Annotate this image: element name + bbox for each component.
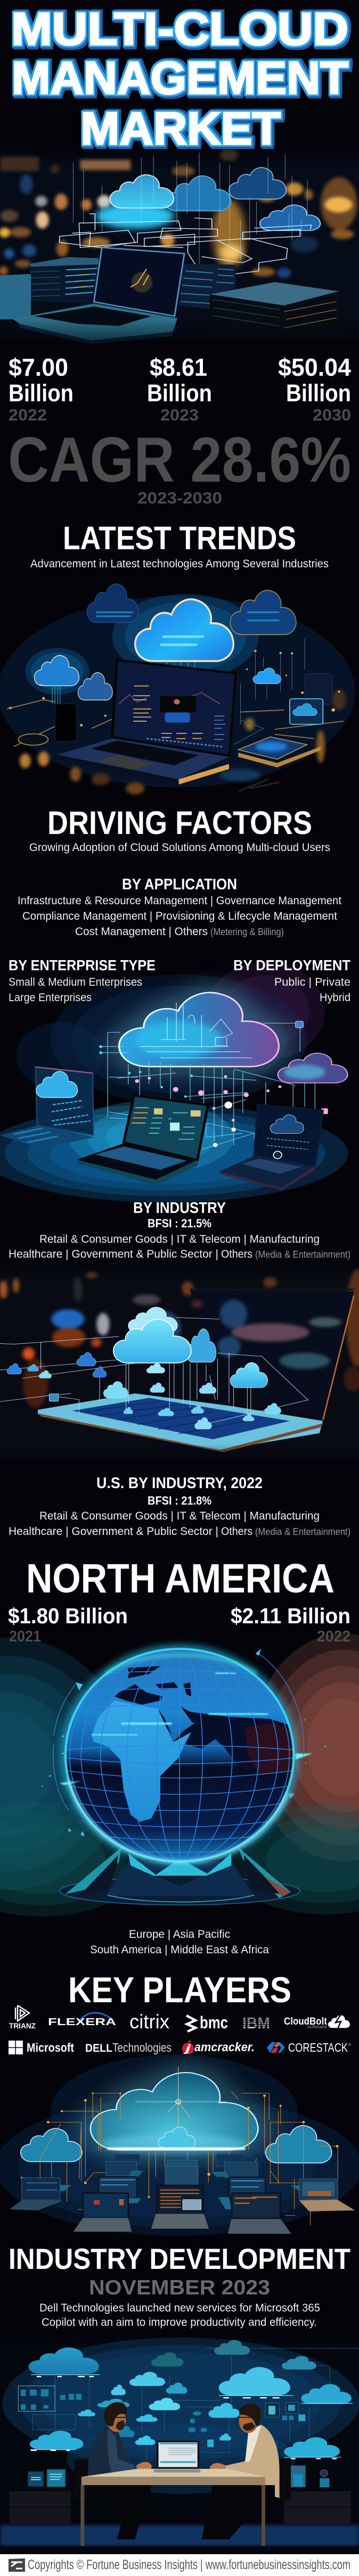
segment: by application (18, 876, 341, 938)
segment: by enterprise type: BY ENTERPRISE TYPE (9, 957, 156, 973)
North America 2021 value: $1.80 Billion (8, 1604, 128, 1628)
stat: 2022 market size: 2022 (9, 406, 47, 424)
segment: by enterprise type (9, 957, 156, 1004)
segment: by deployment (233, 957, 350, 1004)
front row laptops (74, 2185, 291, 2234)
laptop array (9, 2154, 355, 2234)
floor (0, 2525, 359, 2554)
segment: by industry: BY INDUSTRY (133, 1200, 226, 1217)
stat: 2023 market size: Billion (147, 379, 212, 407)
data chip (49, 1394, 59, 1401)
segment: by industry: Others (221, 1248, 252, 1260)
stat: 2030 market size: Billion (286, 379, 351, 407)
back row laptops (106, 2154, 258, 2185)
stat: 2022 market size (9, 353, 74, 424)
segment: by deployment: Public | Private (274, 976, 350, 988)
North America 2022 value (231, 1604, 350, 1645)
logo: Trianz: TRIANZ (9, 2021, 36, 2030)
orange network lines (40, 2091, 338, 2226)
North America 2022 value: 2022 (317, 1628, 350, 1645)
title: MANAGEMENT (12, 53, 348, 104)
logo: IBM: IBM (242, 2015, 270, 2032)
heading: key players: KEY PLAYERS (68, 1970, 291, 2010)
development description: Dell Technologies launched new services for Microsoft 365 (39, 2302, 320, 2314)
glow beneath clouds (83, 200, 245, 269)
logo: Citrix: citrix (129, 2011, 169, 2033)
segment: by deployment: Hybrid (320, 992, 350, 1004)
right laptop (219, 1105, 323, 1190)
floor glow (0, 1105, 348, 1202)
circuit network (101, 1023, 315, 1150)
driving factors description: Growing Adoption of Cloud Solutions Among Multi-cloud Users (29, 841, 330, 854)
stat: 2022 market size: Billion (9, 379, 74, 407)
scene: cloud network with laptops (0, 2054, 359, 2236)
segment: U.S. by industry (9, 1475, 350, 1538)
segment: by industry: BFSI : 21.5% (148, 1217, 211, 1230)
segment: U.S. by industry: (Media & Entertainment) (255, 1526, 350, 1537)
logo: Dell Technologies (85, 2041, 172, 2054)
scene: laptop with floating clouds (0, 1255, 359, 1471)
segment: by industry: Retail & Consumer Goods | IT & Telecom | Manufacturing (39, 1233, 320, 1245)
latitude and longitude grid (66, 1650, 293, 1861)
scene: clouds above laptops (0, 962, 348, 1202)
logo: Microsoft: Microsoft (27, 2041, 74, 2054)
logo: CoreStack (267, 2041, 352, 2054)
segment: by enterprise type: Large Enterprises (9, 992, 92, 1004)
other regions: Europe | Asia Pacific (129, 1928, 230, 1941)
North America 2022 value: $2.11 Billion (231, 1604, 350, 1628)
logo: Jamcracker: amcracker. (194, 2040, 255, 2054)
center laptop (77, 1095, 208, 1185)
bottom table items (238, 779, 280, 791)
left server rack (30, 257, 99, 303)
segment: by application: Compliance Management | Provisioning & Lifecycle Management (22, 910, 337, 922)
scene: two professionals at a table with clouds (0, 2331, 359, 2554)
circuit lines (60, 214, 312, 276)
logo: Flexera: FLEXERA (48, 2017, 116, 2027)
hero illustration: clouds, laptop and servers (0, 143, 359, 357)
main glowing cloud (119, 993, 279, 1067)
left cloud (21, 2128, 82, 2162)
trends illustration: laptop with clouds (0, 584, 355, 795)
title: MARKET (80, 103, 281, 154)
logo: BMC: bmc (200, 2013, 228, 2032)
dark land masses (115, 1666, 290, 1766)
stat: 2023 market size: $8.61 (150, 353, 207, 381)
logo: CloudBolt: CloudBolt (284, 2016, 328, 2027)
background clouds (87, 584, 296, 634)
segment: U.S. by industry: Retail & Consumer Goods | IT & Telecom | Manufacturing (39, 1510, 320, 1522)
logo: Trianz (9, 2005, 36, 2030)
platforms (7, 700, 344, 747)
left laptop (0, 1067, 94, 1149)
segment: by application: Infrastructure & Resource Management | Governance Management (18, 895, 341, 907)
segment: U.S. by industry: BFSI : 21.8% (148, 1494, 211, 1507)
footer logo (9, 2558, 25, 2572)
small clouds (7, 1352, 281, 1429)
title: MULTI-CLOUD (11, 4, 348, 55)
other regions (90, 1928, 269, 1956)
logo: Dell Technologies: Technologies (112, 2041, 172, 2054)
logo: CloudBolt (284, 2014, 350, 2029)
globe illustration (0, 1633, 359, 1917)
stat: 2023 market size (147, 353, 212, 424)
laptop on table (153, 2441, 201, 2473)
segment: by application: (Metering & Billing) (210, 927, 284, 937)
side cabinets (9, 2465, 351, 2524)
segment: by industry: Healthcare | Government & Public Sector | (9, 1248, 218, 1260)
left foreground block (0, 274, 31, 319)
development description: Copilot with an aim to improve productivity and efficiency. (42, 2316, 317, 2329)
segment: by industry (9, 1200, 350, 1260)
logo: CloudBolt: software (307, 2024, 327, 2029)
left phone and mouse (18, 704, 77, 745)
segment: U.S. by industry: U.S. BY INDUSTRY, 2022 (96, 1475, 263, 1492)
connection lines (0, 1317, 308, 1424)
heading: driving factors: DRIVING FACTORS (47, 805, 312, 841)
ambient glow (0, 1633, 359, 1917)
segment: by industry: (Media & Entertainment) (255, 1249, 350, 1260)
globe stand (60, 1847, 300, 1905)
table (80, 2469, 265, 2546)
logo: Flexera (48, 2013, 117, 2030)
title (11, 4, 348, 154)
segment: by deployment: BY DEPLOYMENT (233, 957, 350, 973)
date heading: NOVEMBER 2023 (89, 2276, 270, 2299)
blue backdrop (2, 2338, 359, 2494)
sparkles (42, 1649, 326, 1836)
big cloud group (113, 1307, 268, 1388)
CAGR figure: 2023-2030 (137, 489, 222, 507)
footer bar (0, 2554, 359, 2576)
logo: Jamcracker: j (182, 2043, 191, 2054)
segment: U.S. by industry: Healthcare | Government & Public Sector | (9, 1525, 218, 1538)
right devices (238, 674, 332, 767)
laptop (58, 660, 236, 785)
other regions: South America | Middle East & Africa (90, 1944, 269, 1956)
stat: 2022 market size: $7.00 (9, 353, 68, 381)
logo: CoreStack: ® (348, 2043, 352, 2047)
latest trends description: Advancement in Latest technologies Among Several Industries (30, 558, 329, 570)
right server (209, 282, 339, 338)
laptop base and keyboard (38, 1393, 323, 1452)
middle row laptops (9, 2177, 355, 2211)
segment: by enterprise type: Small & Medium Enterprises (9, 976, 142, 988)
stat: 2030 market size: 2030 (313, 406, 351, 424)
North America 2021 value (8, 1604, 128, 1645)
man on the left (85, 2402, 152, 2539)
side clouds (34, 655, 281, 700)
logo: BMC (186, 2013, 228, 2032)
center rack (178, 264, 236, 310)
logo: Microsoft (9, 2041, 74, 2054)
chairs (75, 2459, 291, 2500)
main cloud (135, 599, 233, 661)
segment: by application: BY APPLICATION (122, 876, 237, 893)
laptop screen (190, 1290, 354, 1420)
clouds (110, 168, 320, 230)
stat: 2023 market size: 2023 (160, 406, 199, 424)
man on the right (201, 2404, 280, 2539)
light streaks (92, 1672, 268, 1736)
segment: U.S. by industry: Others (221, 1525, 252, 1538)
heading: latest trends: LATEST TRENDS (63, 520, 296, 556)
cloud set (29, 2340, 353, 2458)
network lines (18, 2348, 359, 2461)
small pink cloud (278, 1053, 347, 1083)
stat: 2030 market size: $50.04 (278, 353, 351, 381)
logo: Dell Technologies: DELL (85, 2042, 112, 2054)
connector cubes (296, 1021, 328, 1114)
stat: 2030 market size (278, 353, 351, 424)
globe sphere (46, 1644, 314, 1866)
logo: Flexera: SOFTWARE (83, 2027, 117, 2030)
segment: by application: Cost Management | Others (75, 926, 208, 938)
icon panels (21, 2389, 305, 2447)
laptop (13, 247, 184, 344)
North America 2021 value: 2021 (9, 1628, 41, 1645)
Africa (92, 1700, 191, 1822)
right cloud (266, 2126, 332, 2163)
main cloud (91, 2067, 258, 2154)
development description (39, 2302, 320, 2329)
